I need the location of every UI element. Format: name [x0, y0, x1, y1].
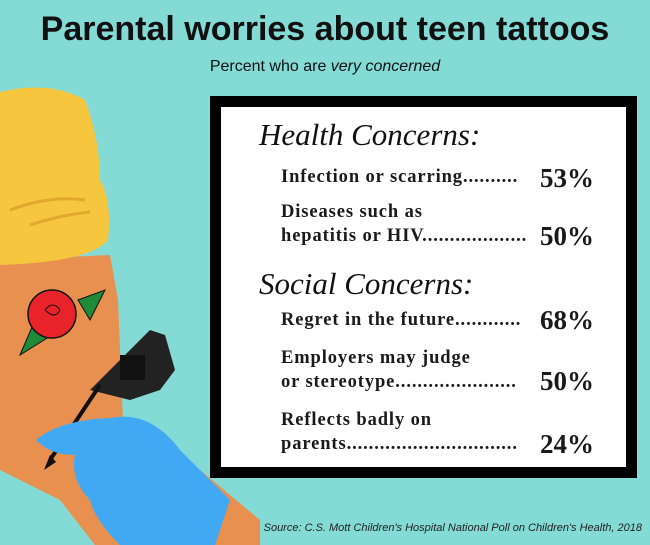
- title: Parental worries about teen tattoos: [41, 10, 609, 48]
- item: employers: or stereotype......................: [281, 372, 517, 392]
- heading: health: Health Concerns:: [259, 117, 480, 152]
- arm: [0, 255, 260, 545]
- item: diseases: [281, 202, 527, 246]
- source: Source: C.S. Mott Children's Hospital National Poll on Children's Health, 2018: [264, 522, 642, 534]
- pct 68: 68%: [540, 305, 594, 335]
- item: diseases: Diseases such as: [281, 202, 423, 222]
- icon: rose: [20, 290, 105, 355]
- icon: tattoo machine: [44, 330, 175, 470]
- pct 50: 50%: [540, 366, 594, 396]
- item: infection: Infection or scarring..........: [281, 167, 518, 187]
- item: reflects: [281, 410, 518, 454]
- pct 50: 50%: [540, 221, 594, 251]
- pct 24: 24%: [540, 429, 594, 459]
- illustration: arm with tattoo: [0, 88, 260, 545]
- sleeve: [0, 88, 109, 265]
- item: diseases: hepatitis or HIV...................: [281, 226, 527, 246]
- heading: social: Social Concerns:: [259, 266, 473, 301]
- glove: [36, 417, 230, 545]
- item: employers: Employers may judge: [281, 348, 471, 368]
- item: employers: [281, 348, 517, 392]
- item: reflects: parents...............................: [281, 434, 518, 454]
- item: regret: Regret in the future............: [281, 310, 521, 330]
- pct 53: 53%: [540, 163, 594, 193]
- panel: concerns box: [210, 96, 637, 478]
- item: reflects: Reflects badly on: [281, 410, 432, 430]
- subtitle: Percent who are very concerned: [210, 58, 440, 75]
